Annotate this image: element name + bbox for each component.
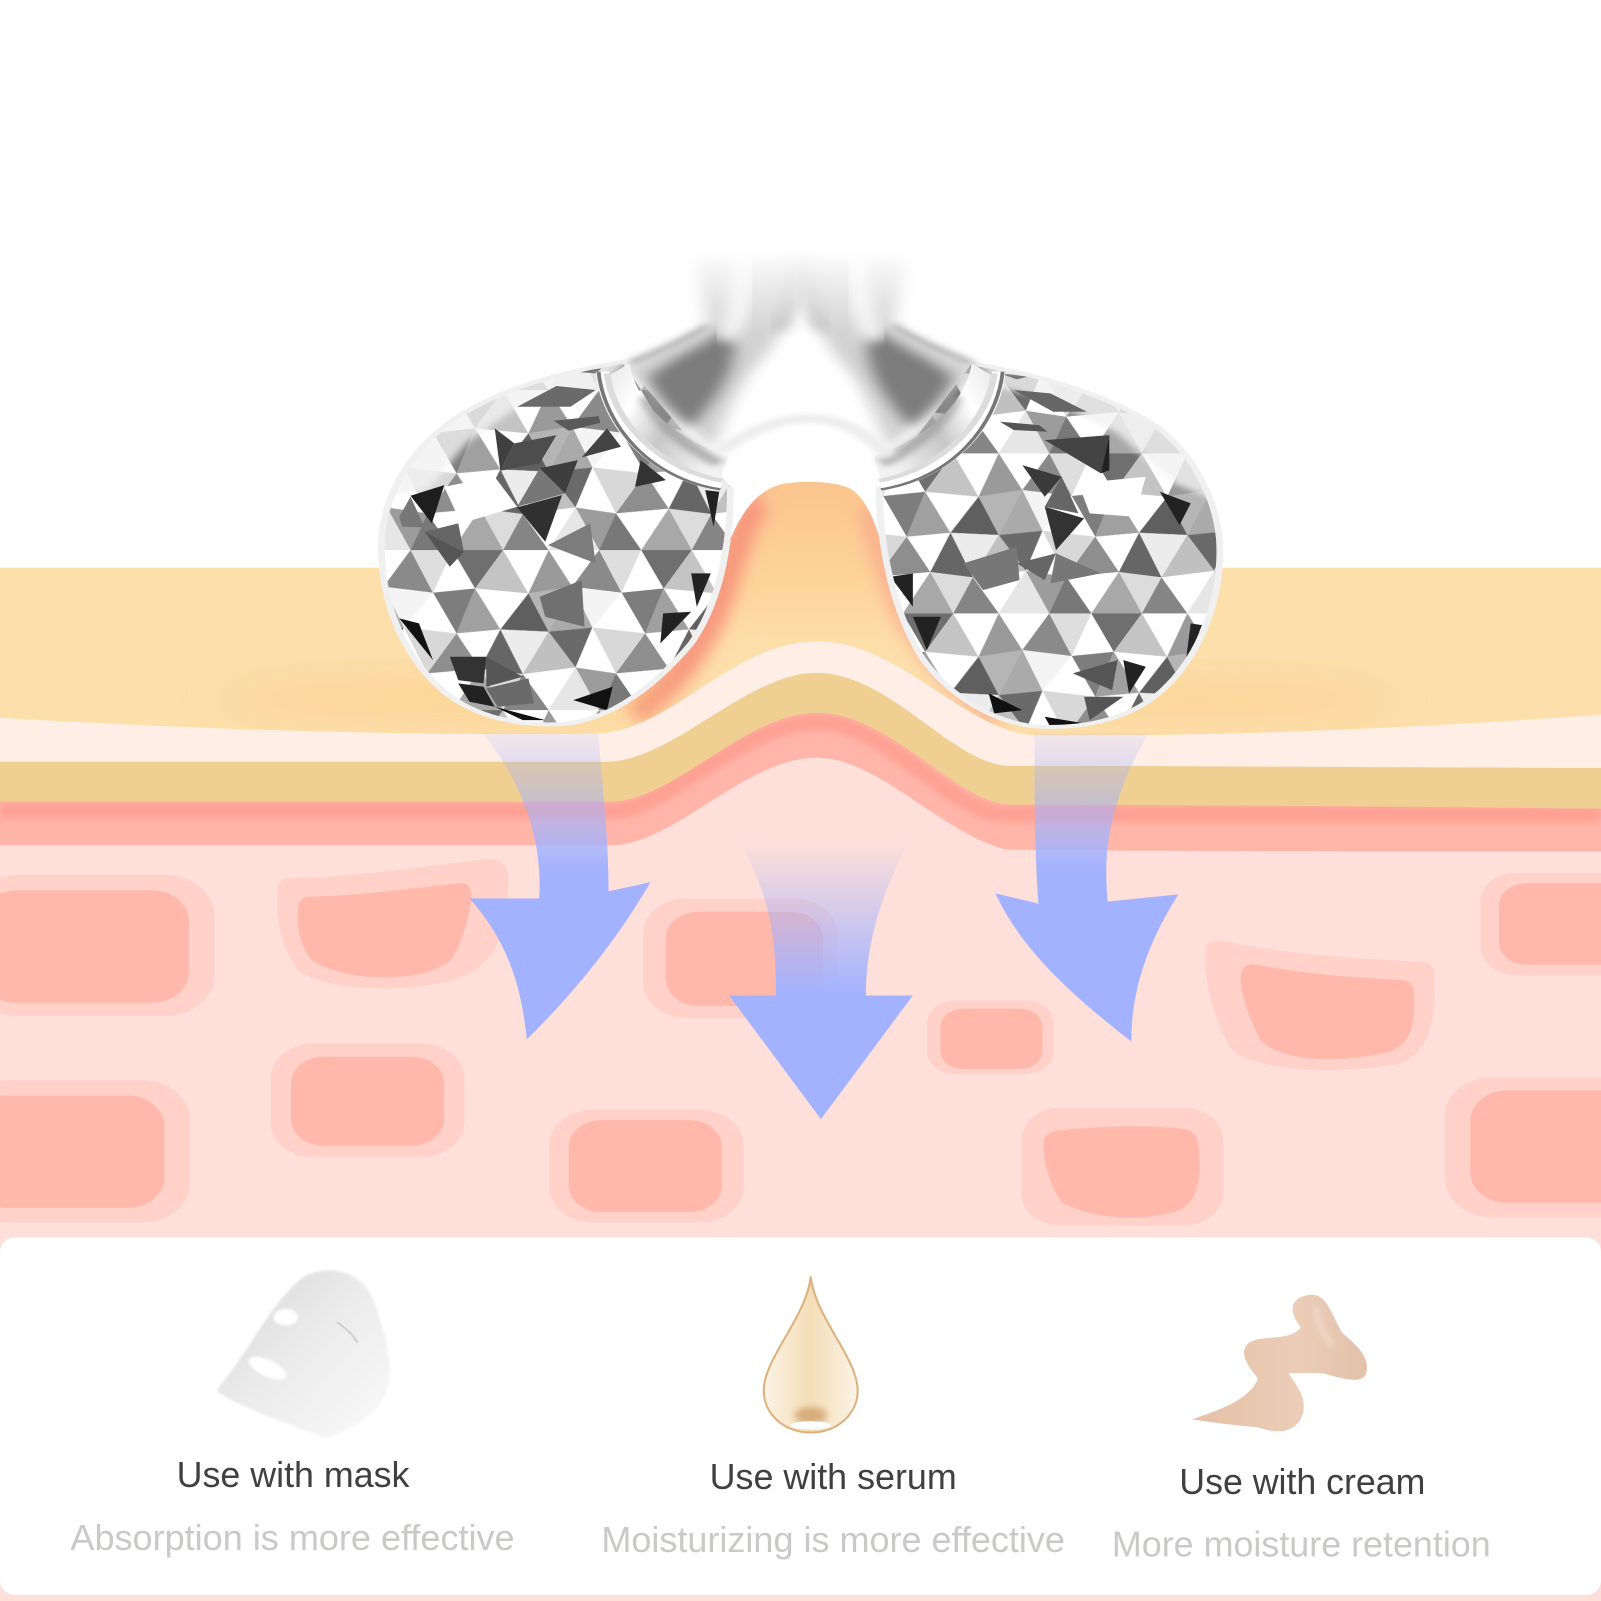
cell <box>549 1110 743 1222</box>
cell <box>643 899 837 1018</box>
label: moisture retention: More moisture retention <box>1112 1525 1491 1565</box>
arrow: right <box>996 733 1178 1041</box>
cell <box>1481 873 1601 975</box>
roller device <box>377 240 1224 727</box>
left handle arm <box>599 250 801 489</box>
cell <box>1445 1077 1601 1217</box>
dermis red layer <box>0 664 1601 852</box>
cell <box>0 875 214 1016</box>
right faceted roller <box>879 357 1224 727</box>
arrow: centre <box>729 842 913 1119</box>
right handle arm <box>801 250 1003 489</box>
cell <box>927 1001 1054 1074</box>
icon: serum drop <box>764 1276 858 1433</box>
dermis background <box>0 694 1601 1601</box>
cell cluster <box>0 859 1601 1225</box>
label: use with serum: Use with serum <box>710 1457 957 1497</box>
icon: cream swirl <box>1193 1295 1367 1431</box>
label: absorption: Absorption is more effective <box>70 1518 515 1558</box>
cream layer <box>0 613 1601 768</box>
label: use with mask: Use with mask <box>177 1455 410 1495</box>
handle bridge arc <box>719 418 890 457</box>
handle top fade <box>663 240 944 333</box>
panel: product usage <box>0 1238 1601 1595</box>
cell <box>1205 941 1435 1070</box>
cell <box>1021 1108 1223 1225</box>
label: use with cream: Use with cream <box>1179 1462 1425 1502</box>
cell <box>271 1044 465 1157</box>
cell <box>0 1080 190 1222</box>
yellow epidermis layer with nose bump <box>0 482 1601 735</box>
label: moisturizing: Moisturizing is more effective <box>601 1520 1065 1560</box>
tan layer <box>0 633 1601 809</box>
arrow: left <box>470 733 650 1039</box>
pressed skin bump shading <box>214 475 1399 722</box>
icon: face mask <box>216 1270 390 1438</box>
cell <box>277 859 508 988</box>
left faceted roller <box>377 353 730 724</box>
skin cross-section <box>0 475 1601 1601</box>
